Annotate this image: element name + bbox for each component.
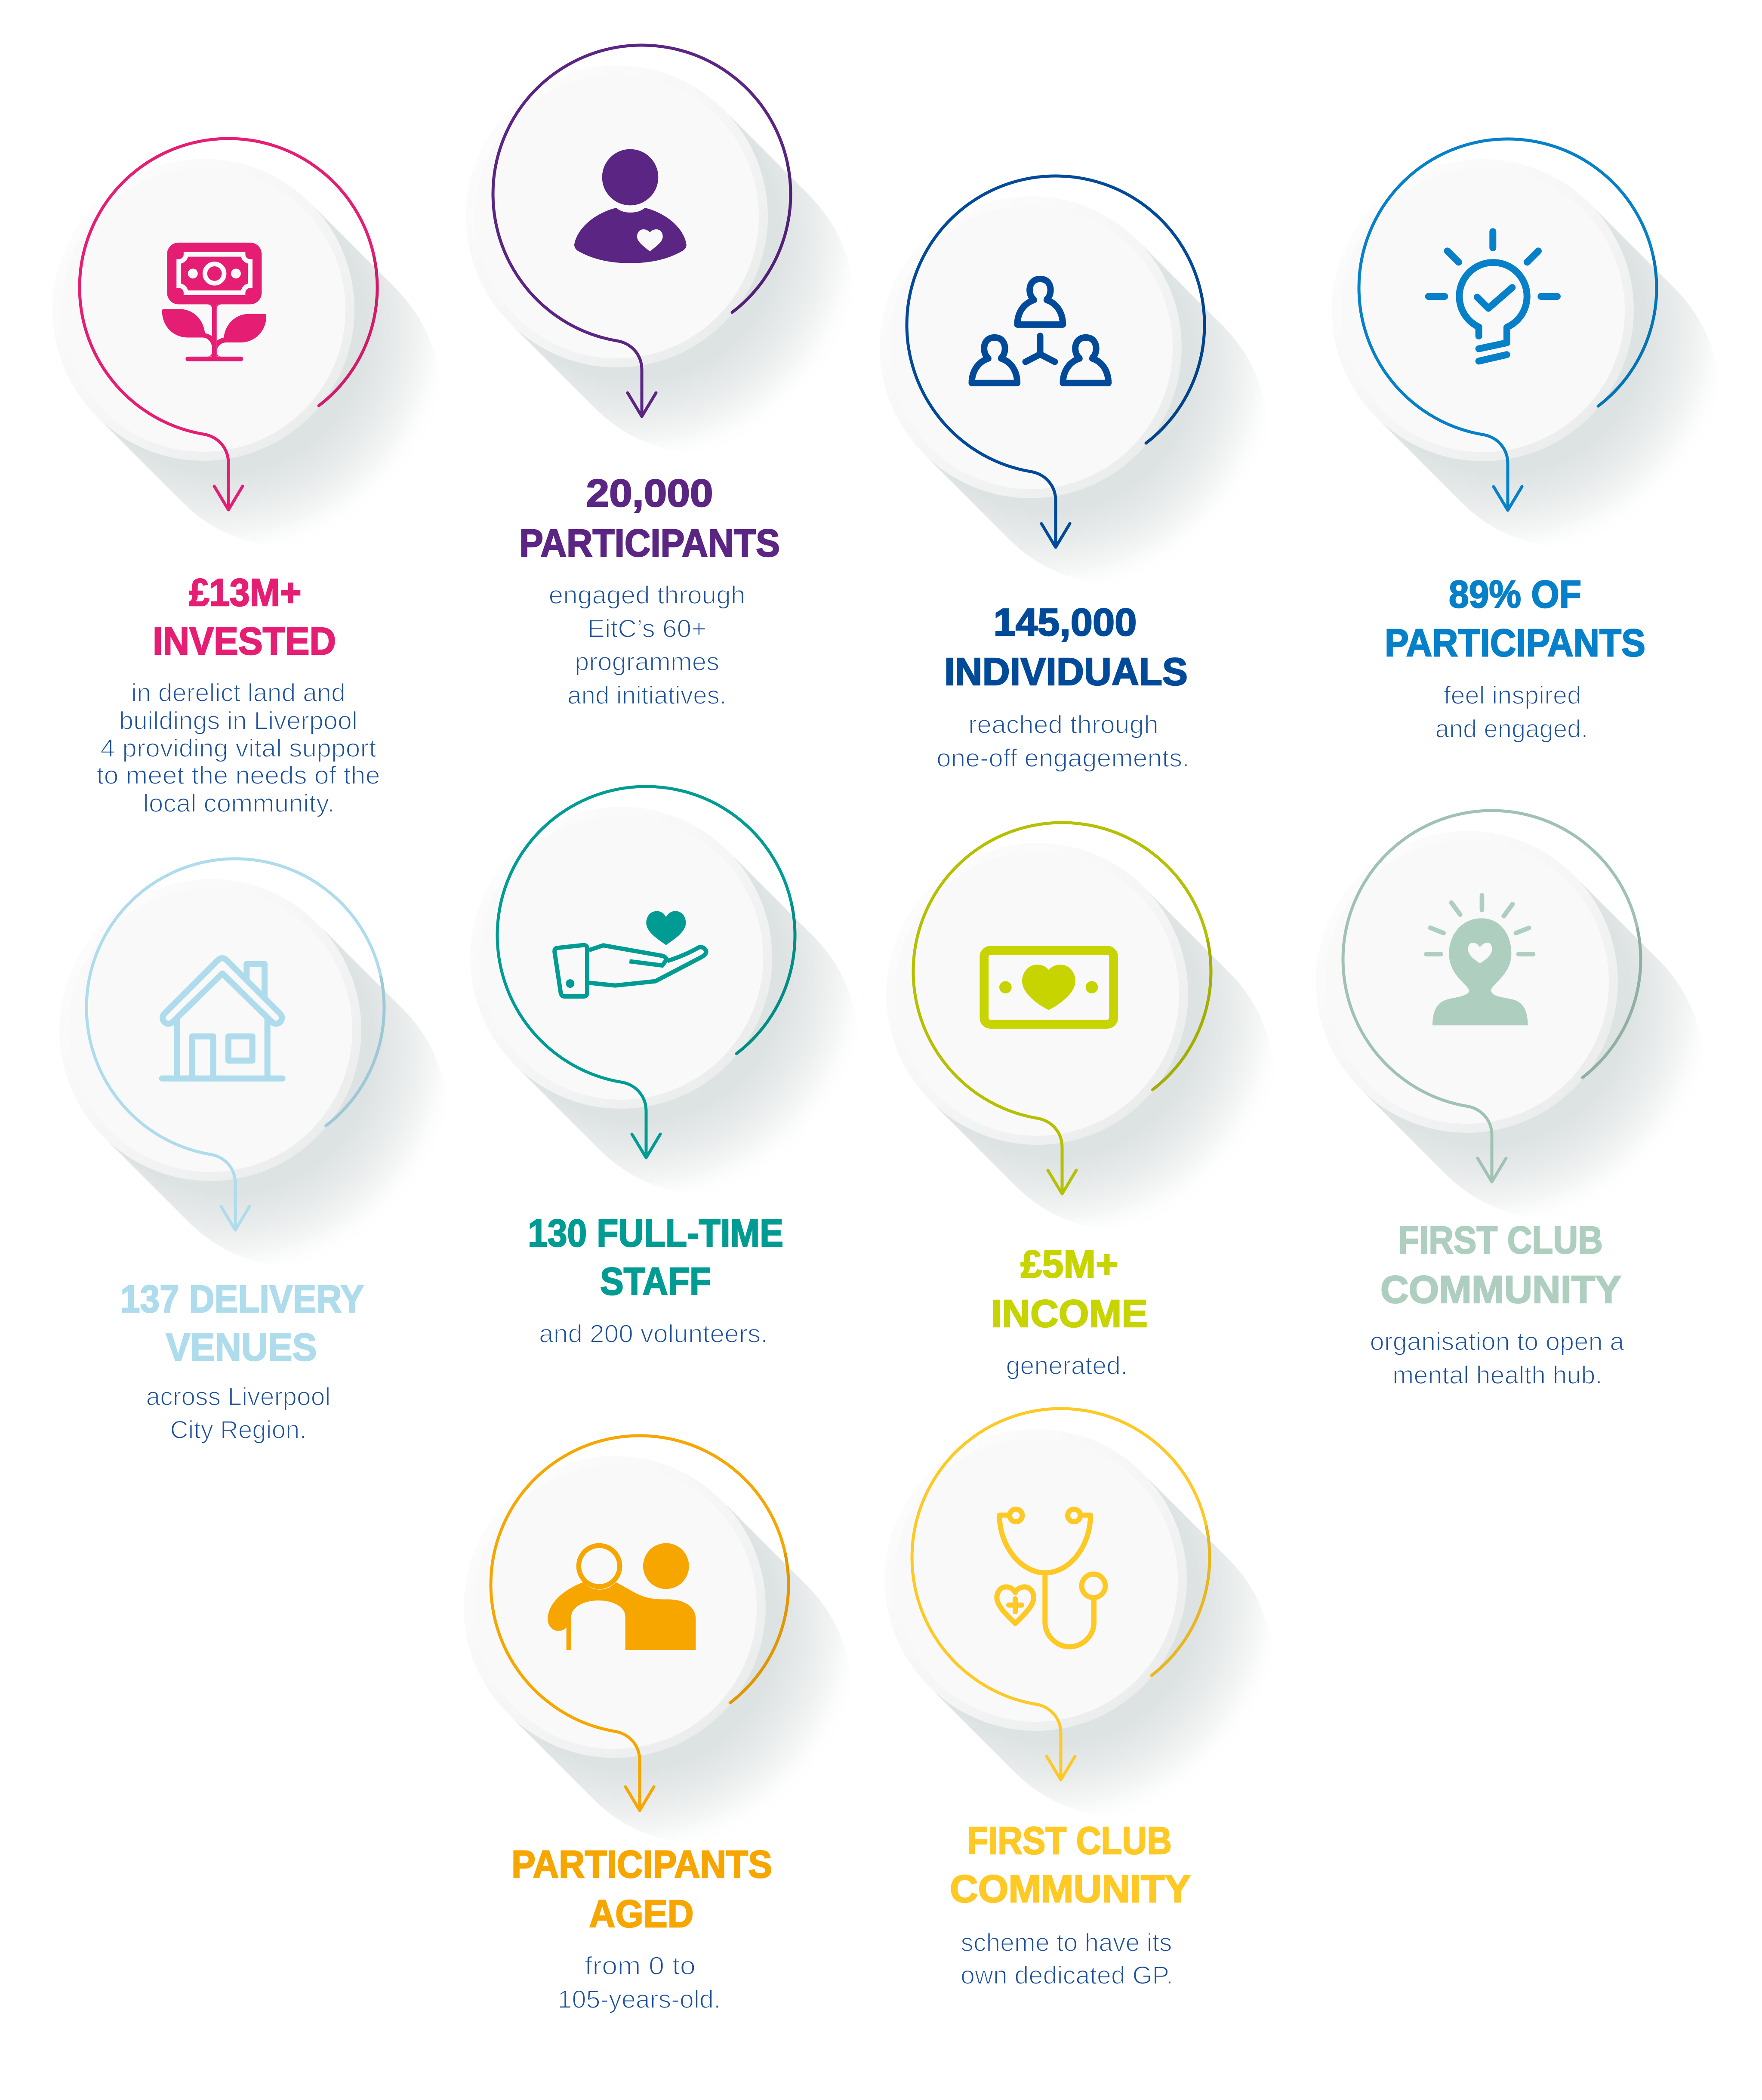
body text: and 200 volunteers. bbox=[539, 1320, 768, 1348]
panel: 130 full-time staff bbox=[470, 786, 795, 1348]
heading bbox=[950, 1819, 1191, 1911]
heading bbox=[1380, 1219, 1621, 1311]
heading: 137 DELIVERY bbox=[120, 1278, 364, 1321]
heading bbox=[153, 571, 336, 663]
body text: City Region. bbox=[170, 1416, 306, 1444]
heading: COMMUNITY bbox=[1380, 1268, 1621, 1311]
body text: one-off engagements. bbox=[936, 744, 1189, 772]
heading bbox=[991, 1243, 1148, 1335]
body text: feel inspired bbox=[1444, 681, 1581, 709]
heading: FIRST CLUB bbox=[1398, 1219, 1603, 1262]
disc and arrow ring bbox=[466, 45, 791, 416]
disc and arrow ring bbox=[886, 823, 1211, 1194]
body text: across Liverpool bbox=[146, 1383, 330, 1411]
panel: 137 delivery venues bbox=[59, 859, 384, 1444]
panel: 20,000 participants bbox=[466, 45, 791, 709]
heading: COMMUNITY bbox=[950, 1868, 1191, 1911]
body text: 105-years-old. bbox=[558, 1986, 721, 2014]
heading bbox=[1385, 573, 1645, 665]
icon: house bbox=[162, 958, 283, 1079]
heading: 89% OF bbox=[1449, 573, 1581, 616]
body text bbox=[146, 1383, 330, 1444]
panel: participants aged bbox=[464, 1436, 789, 2014]
disc and arrow ring bbox=[885, 1409, 1210, 1780]
icon: person with heart bbox=[574, 149, 687, 263]
body text: own dedicated GP. bbox=[961, 1961, 1173, 1989]
body text: 4 providing vital support bbox=[101, 734, 376, 762]
body text: EitC’s 60+ bbox=[588, 615, 706, 643]
body text: local community. bbox=[143, 789, 335, 817]
heading: PARTICIPANTS bbox=[519, 522, 780, 565]
panel: first club community GP bbox=[885, 1409, 1210, 1989]
panel: 145,000 individuals bbox=[880, 176, 1204, 772]
heading: INCOME bbox=[991, 1292, 1148, 1335]
heading bbox=[519, 472, 780, 565]
heading: 20,000 bbox=[586, 472, 713, 515]
body text bbox=[96, 679, 380, 817]
heading: AGED bbox=[589, 1893, 693, 1936]
body text bbox=[1370, 1328, 1624, 1389]
disc and arrow ring bbox=[1332, 139, 1657, 510]
heading: £13M+ bbox=[189, 571, 301, 614]
icon: three people network bbox=[972, 279, 1109, 383]
body text bbox=[936, 711, 1189, 772]
panel: 89% of participants bbox=[1332, 139, 1657, 743]
disc and arrow ring bbox=[470, 786, 795, 1158]
body text bbox=[1435, 681, 1588, 743]
body text: engaged through bbox=[549, 581, 745, 609]
body text: mental health hub. bbox=[1392, 1361, 1602, 1389]
icon: money plant bbox=[162, 243, 266, 359]
heading: INVESTED bbox=[153, 620, 336, 663]
body text: from 0 to bbox=[585, 1952, 696, 1980]
heading: VENUES bbox=[166, 1326, 317, 1369]
body text: organisation to open a bbox=[1370, 1328, 1624, 1356]
heading: FIRST CLUB bbox=[967, 1819, 1172, 1863]
heading bbox=[944, 601, 1188, 694]
icon: two people bbox=[548, 1543, 696, 1650]
disc and arrow ring bbox=[59, 859, 384, 1230]
heading bbox=[511, 1843, 772, 1936]
body text bbox=[961, 1929, 1173, 1989]
icon: banknote with heart bbox=[984, 950, 1114, 1024]
heading: PARTICIPANTS bbox=[1385, 622, 1645, 665]
body text bbox=[558, 1952, 721, 2014]
body text: reached through bbox=[968, 711, 1158, 739]
panel: £13M+ invested bbox=[52, 139, 380, 817]
body text: to meet the needs of the bbox=[96, 762, 380, 789]
heading: INDIVIDUALS bbox=[944, 651, 1188, 694]
panel: £5M+ income bbox=[886, 823, 1211, 1380]
body text: scheme to have its bbox=[961, 1929, 1172, 1957]
heading: 145,000 bbox=[994, 601, 1137, 644]
icon: stethoscope bbox=[997, 1509, 1105, 1647]
disc and arrow ring bbox=[880, 176, 1204, 547]
body text: and initiatives. bbox=[567, 681, 727, 709]
body text bbox=[549, 581, 745, 709]
icon: light bulb with check bbox=[1429, 231, 1557, 361]
heading: £5M+ bbox=[1020, 1243, 1118, 1286]
panel: first club community mental health hub bbox=[1316, 811, 1641, 1389]
body text: generated. bbox=[1006, 1352, 1128, 1380]
icon: hand holding heart bbox=[554, 911, 706, 996]
heading: STAFF bbox=[600, 1260, 711, 1303]
heading bbox=[528, 1212, 783, 1303]
body text: in derelict land and bbox=[131, 679, 345, 707]
body text: and engaged. bbox=[1435, 715, 1588, 743]
disc and arrow ring bbox=[464, 1436, 789, 1810]
disc and arrow ring bbox=[52, 139, 377, 510]
body text: buildings in Liverpool bbox=[119, 707, 357, 735]
body text: programmes bbox=[575, 648, 719, 676]
heading: PARTICIPANTS bbox=[511, 1843, 772, 1886]
heading bbox=[120, 1278, 364, 1369]
disc and arrow ring bbox=[1316, 811, 1641, 1182]
heading: 130 FULL-TIME bbox=[528, 1212, 783, 1255]
icon: head with heart bbox=[1426, 895, 1533, 1025]
